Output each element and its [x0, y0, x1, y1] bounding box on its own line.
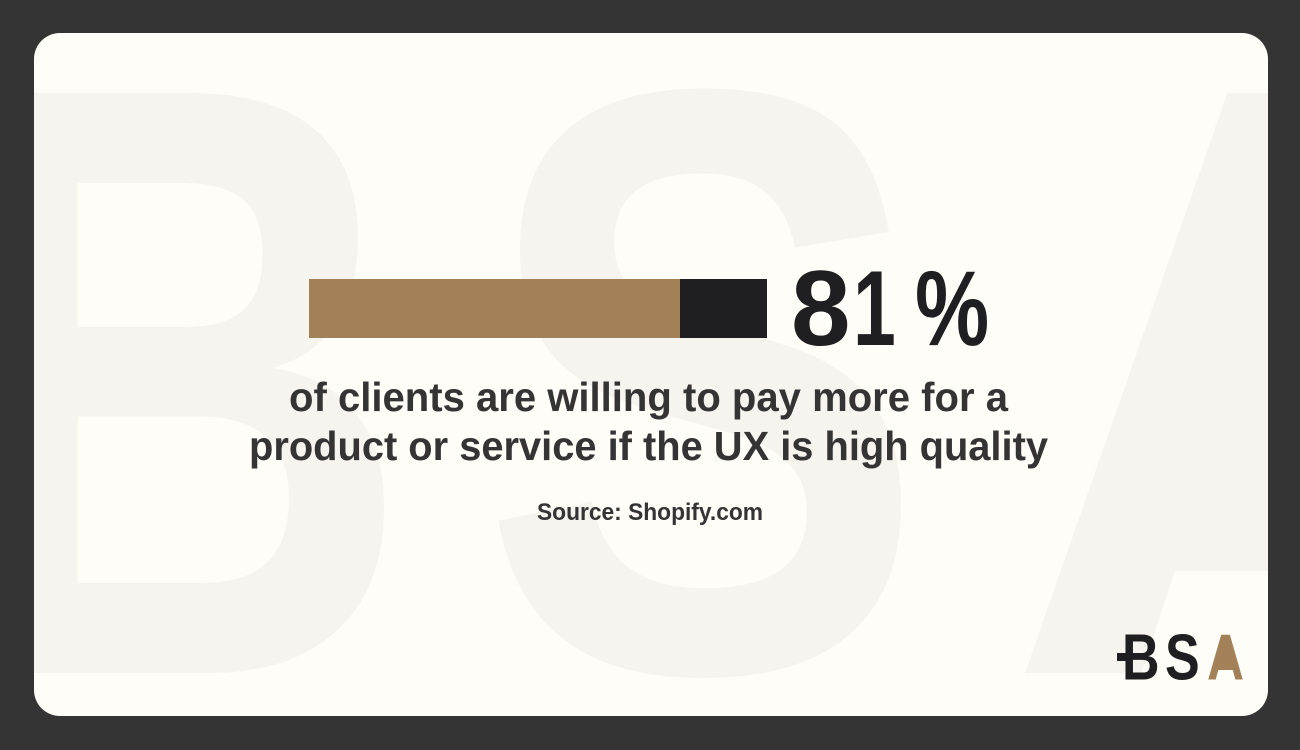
- headline text: of clients are willing to pay more for a: [289, 374, 1009, 420]
- bar segment: filled portion: [309, 279, 680, 338]
- progress bar: 81 percent: [309, 279, 767, 338]
- big number: 81%: 8: [791, 248, 851, 368]
- big number: 81%: [791, 248, 989, 368]
- logo: BSA: [1117, 622, 1244, 694]
- logo letter A: A: [1207, 622, 1244, 694]
- headline text: product or service if the UX is high quality: [249, 423, 1048, 469]
- headline text: [249, 374, 1048, 469]
- big number: 81%: %: [915, 249, 989, 368]
- logo letter B with crossbar: B: [1122, 622, 1160, 694]
- bar segment: remaining portion: [680, 279, 767, 338]
- big number: 81%: 1: [853, 249, 896, 368]
- source note: Source: Shopify.com: [537, 499, 763, 526]
- logo letter S: S: [1165, 622, 1200, 694]
